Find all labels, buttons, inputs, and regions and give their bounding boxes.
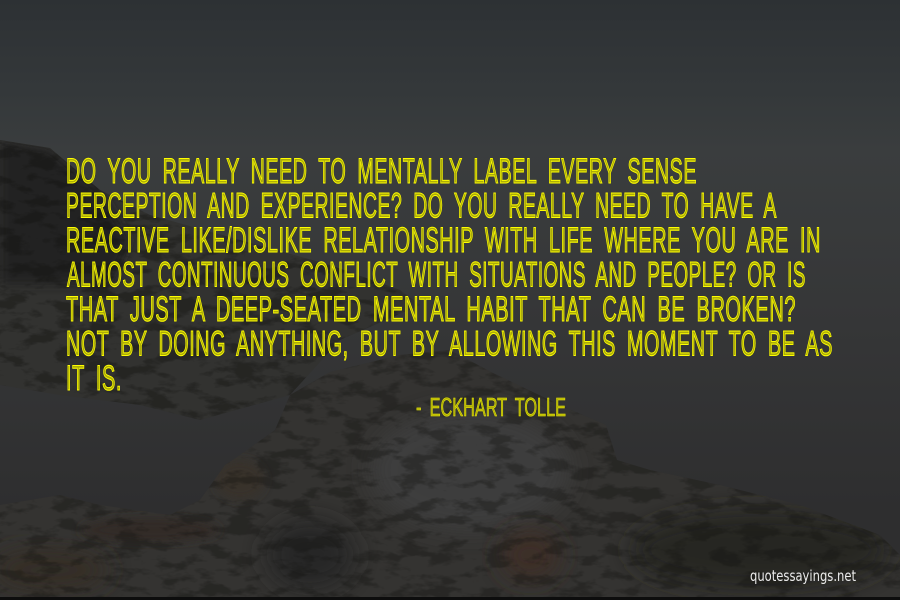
quote text [66, 152, 833, 398]
foreground rock [0, 340, 900, 600]
attribution: - ECKHART TOLLE [416, 392, 566, 422]
watermark: quotessayings.net [750, 567, 856, 585]
quote line 7: IT IS. [66, 359, 122, 398]
left cliff and rock band [0, 130, 430, 430]
bottom edge [0, 597, 900, 600]
